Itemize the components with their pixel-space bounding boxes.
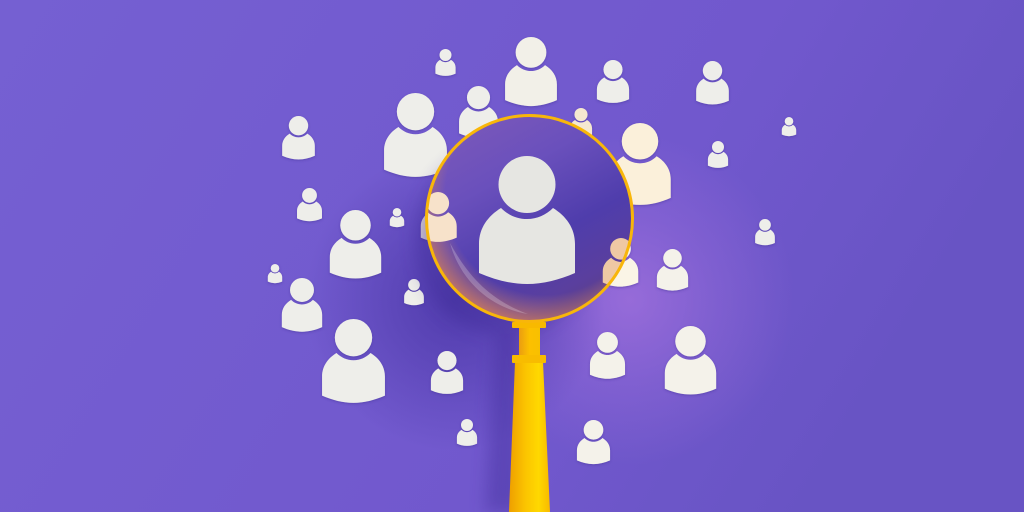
glass lens bbox=[419, 116, 639, 322]
person icon: lower right medium bbox=[590, 332, 625, 379]
person icon: behind lens top right bbox=[570, 108, 592, 137]
person icon: right small bbox=[708, 141, 728, 168]
person icon: bottom centre-left bbox=[431, 351, 463, 394]
person icon: behind lens right large bbox=[609, 123, 671, 205]
person icon: partly behind lens right edge bbox=[602, 238, 638, 287]
person icon: right small lower bbox=[755, 219, 775, 245]
person icon: top right medium bbox=[597, 60, 629, 103]
person icon: lower left medium bbox=[282, 278, 322, 332]
person icon: bottom right of handle bbox=[577, 420, 610, 464]
handle bbox=[509, 322, 550, 512]
person icon: partly behind lens left edge bbox=[421, 192, 458, 242]
person icon: lower centre-left small bbox=[404, 279, 424, 305]
refracted person: left edge bbox=[428, 192, 457, 242]
person icon: left tiny bbox=[390, 208, 404, 227]
person icon: upper left large bbox=[384, 93, 447, 177]
person icon: lower right large bbox=[665, 326, 716, 394]
magnifying glass bbox=[415, 116, 639, 512]
magnifier shadow bbox=[415, 145, 595, 512]
person icon: top centre large bbox=[505, 37, 557, 106]
people icons scattered around the magnifier bbox=[268, 37, 796, 464]
person icon: left medium bbox=[330, 210, 381, 278]
person icon: far left tiny bbox=[268, 264, 282, 283]
glass reflection bbox=[450, 243, 528, 314]
person icon: upper right medium bbox=[696, 61, 729, 105]
person icon: top small bbox=[435, 49, 456, 76]
person icon: far right tiny bbox=[782, 117, 796, 136]
person icon: bottom left large bbox=[322, 319, 385, 403]
magnified person bbox=[479, 156, 575, 284]
person icon: right of lens bbox=[657, 249, 688, 291]
person icon: behind lens top left bbox=[459, 86, 498, 138]
person icon: upper left medium bbox=[282, 116, 315, 160]
person icon: bottom small bbox=[457, 419, 477, 446]
person icon: left small bbox=[297, 188, 322, 221]
yellow rim bbox=[426, 116, 632, 322]
refracted person: right edge bbox=[602, 238, 628, 284]
